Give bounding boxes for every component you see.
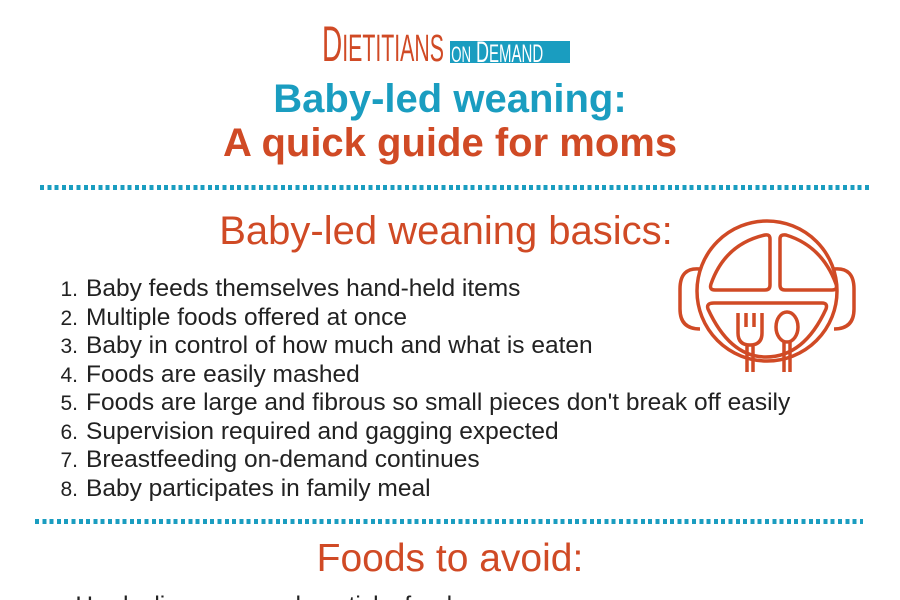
list: basics: 8. — [60, 478, 78, 500]
title: A quick guide for moms — [223, 121, 677, 165]
list: basics: Baby in control of how much and what is eaten — [86, 332, 593, 359]
list: basics: Supervision required and gagging expected — [86, 418, 559, 444]
list: basics: 2. — [60, 306, 78, 330]
list: basics: 3. — [60, 335, 78, 358]
list: basics: 1. — [60, 278, 78, 301]
logo — [322, 16, 570, 72]
heading: foods to avoid: Foods to avoid: — [317, 537, 583, 580]
logo: DIETITIANS — [322, 16, 444, 72]
list: basics: 7. — [60, 449, 78, 472]
title: Baby-led weaning: — [273, 77, 627, 121]
list: basics: 4. — [60, 364, 78, 386]
list: basics: Foods are large and fibrous so small pieces don't break off easily — [86, 389, 790, 416]
title — [223, 77, 677, 165]
heading: basics: Baby-led weaning basics: — [219, 209, 673, 253]
list: basics: Multiple foods offered at once — [86, 304, 407, 330]
list: basics: 5. — [60, 392, 78, 415]
list: basics: Baby participates in family meal — [86, 474, 431, 502]
list: basics: Foods are easily mashed — [86, 360, 360, 388]
icon: plate with fork and spoon — [678, 219, 856, 372]
list: basics: Baby feeds themselves hand-held items — [86, 275, 520, 302]
list: basics — [60, 275, 790, 502]
list: basics: 6. — [60, 420, 78, 444]
list: basics: Breastfeeding on-demand continues — [86, 446, 480, 473]
